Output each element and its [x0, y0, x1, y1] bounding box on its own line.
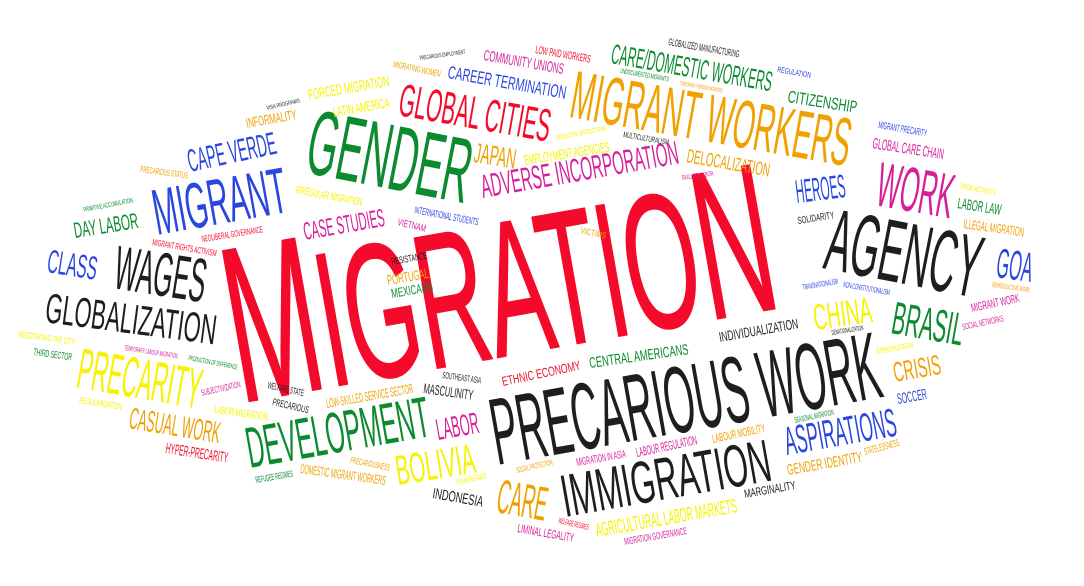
word: Globalization: GLOBALIZATION: [43, 284, 219, 353]
word: Migrant Rights Activism: MIGRANT RIGHTS ACTIVISM: [152, 237, 217, 258]
word: Ethnic Economy: ETHNIC ECONOMY: [501, 358, 582, 389]
word cloud: PRECARITY: [73, 337, 207, 422]
word cloud: SOCIAL NETWORKS: [961, 313, 1004, 332]
word: Labour Mobility: LABOUR MOBILITY: [711, 421, 766, 446]
word cloud: ADVERSE INCORPORATION: [478, 134, 681, 205]
word: Citizenship: CITIZENSHIP: [786, 87, 858, 117]
word: Resistance: RESISTANCE: [391, 251, 428, 268]
word cloud: SYRIAN REFUGEES: [455, 471, 488, 487]
word: Vietnam: VIETNAM: [396, 217, 427, 235]
word cloud: CARE: [493, 471, 552, 532]
word cloud: ASPIRATIONS: [781, 401, 900, 464]
word cloud: SOCIAL PROTECTION: [515, 458, 554, 475]
word: Latin America: LATIN AMERICA: [332, 94, 391, 120]
word cloud: TRANSNATIONALISM: [802, 277, 839, 292]
word: Precarious Employment: PRECARIOUS EMPLOYMENT: [419, 50, 466, 62]
word: Labor Law: LABOR LAW: [956, 195, 1003, 219]
word: Low Paid Workers: LOW PAID WORKERS: [534, 44, 592, 66]
word cloud: BRASIL: [888, 292, 968, 355]
word: Negotiating the City: NEGOTIATING THE CITY: [18, 329, 76, 347]
word: Day Labor: DAY LABOR: [72, 208, 140, 243]
word: Primitive Accumulation: PRIMITIVE ACCUMULATION: [83, 198, 133, 214]
word cloud: CLASS: [45, 242, 100, 287]
word: Portugal: PORTUGAL: [386, 265, 430, 288]
word cloud: DOMESTIC MIGRANT WORKERS: [300, 461, 387, 488]
word cloud: WAGES: [110, 234, 211, 316]
word cloud: HYPER-PRECARITY: [164, 440, 229, 467]
word: Union Activists: UNION ACTIVISTS: [959, 181, 997, 198]
word: Regularization: REGULARIZATION: [79, 395, 123, 412]
word cloud: WELFARE STATE: [266, 380, 305, 399]
word cloud: INTERNATIONAL STUDENTS: [413, 205, 479, 228]
word cloud: WORK: [872, 150, 960, 232]
word: Individualization: INDIVIDUALIZATION: [718, 315, 799, 345]
word: Community Unions: COMMUNITY UNIONS: [482, 47, 565, 78]
word: Masculinity: MASCULINITY: [423, 380, 475, 403]
word: Delocalization: DELOCALIZATION: [685, 146, 772, 182]
word cloud: AGRICULTURAL LABOR MARKETS: [594, 495, 739, 542]
word: Migrant Work: MIGRANT WORK: [970, 291, 1021, 315]
word cloud: REPRODUCTIVE WORK: [992, 282, 1030, 294]
word cloud: GLOBALIZED MANUFACTURING: [667, 37, 740, 60]
word cloud: CARE/DOMESTIC WORKERS: [609, 38, 775, 97]
word cloud: SUBJECTIVIZATION: [200, 379, 241, 398]
word: China: CHINA: [810, 289, 875, 338]
word cloud: MIGRATION GOVERNANCE: [624, 526, 688, 548]
word: Labor Migration: LABOR MIGRATION: [214, 404, 269, 423]
word: Mexicans: MEXICANS: [390, 279, 434, 301]
word cloud: NON-CONSTITUTIONALISM: [843, 280, 891, 297]
word cloud: WELFARE REGIMES: [558, 516, 590, 532]
word cloud: PRODUCTION OF DIFFERENCE: [188, 355, 238, 372]
word cloud: STATELESSNESS: [863, 438, 901, 458]
word cloud: MIGRATION IN ASIA: [575, 448, 627, 469]
word cloud: GLOBAL CITIES: [395, 74, 555, 151]
word cloud: GLOBAL CARE CHAIN: [871, 135, 945, 163]
word: Gender Identity: GENDER IDENTITY: [786, 449, 864, 479]
word cloud: PRODUCTIVE RESTRUCTURING: [556, 125, 607, 142]
word: Marginality: MARGINALITY: [743, 478, 797, 501]
word cloud: GENDER: [299, 92, 481, 223]
word cloud: TEMPORARY LABOUR MIGRATION: [124, 345, 178, 360]
word: Skilled Labor: SKILLED LABOR: [681, 171, 714, 182]
word: Migrating Women: MIGRATING WOMEN: [393, 59, 442, 79]
word: Central Americans: CENTRAL AMERICANS: [588, 341, 690, 372]
word cloud: CASUAL WORK: [127, 402, 223, 450]
word: Crisis: CRISIS: [891, 349, 943, 388]
word: Precarious Status: PRECARIOUS STATUS: [140, 164, 189, 181]
word: Employment Agencies: EMPLOYMENT AGENCIES: [523, 139, 610, 168]
word: Indonesia: INDONESIA: [431, 485, 484, 511]
word cloud: MIGRANT: [147, 153, 292, 249]
word cloud: SOCCER: [896, 386, 928, 408]
word: Migration: MIGRATION: [205, 110, 792, 450]
word: Forced Migration: FORCED MIGRATION: [307, 73, 390, 104]
word: Bolivia: BOLIVIA: [392, 435, 478, 494]
word: Liminal Legality: LIMINAL LEGALITY: [516, 521, 575, 545]
word cloud: LABOUR REGULATION: [635, 432, 698, 460]
word cloud: LABOR: [433, 407, 482, 447]
word cloud: LOW-SKILLED SERVICE SECTOR: [325, 381, 414, 411]
word: Third Sector: THIRD SECTOR: [33, 347, 73, 363]
word: Southeast Asia: SOUTHEAST ASIA: [442, 370, 482, 385]
word cloud: CAPE VERDE: [184, 125, 279, 179]
word: Undocumented Migrants: UNDOCUMENTED MIGRANTS: [620, 68, 669, 84]
word cloud: CASE STUDIES: [301, 204, 387, 246]
word cloud: DENATIONALIZATION: [831, 325, 864, 337]
word cloud: HEROES: [793, 167, 847, 210]
word: Career Termination: CAREER TERMINATION: [446, 62, 568, 103]
word: Multiculturalism: MULTICULTURALISM: [623, 130, 670, 147]
word: Solidarity: SOLIDARITY: [797, 210, 835, 227]
word: Regulation: REGULATION: [777, 65, 812, 80]
word cloud: REFUGEE REGIMES: [255, 469, 294, 485]
word cloud: TEMPORARY FOREIGN WORKERS: [679, 81, 723, 95]
word: Informality: INFORMALITY: [245, 106, 298, 131]
word: Japan: JAPAN: [472, 137, 518, 174]
word: Precarious: PRECARIOUS: [271, 397, 310, 416]
word: Visa Programs: VISA PROGRAMS: [266, 98, 301, 112]
word: Immigration: IMMIGRATION: [556, 427, 776, 530]
word cloud: DEVELOPMENT: [241, 385, 434, 481]
word cloud: SUPEREXPLOITATION: [876, 341, 914, 356]
word cloud: PRECARIOUSNESS: [350, 455, 391, 473]
word: Neoliberal Governance: NEOLIBERAL GOVERNANCE: [201, 224, 264, 244]
word cloud: SEASONAL MIGRATION: [794, 408, 835, 425]
word cloud: MIGRANT PRECARITY: [877, 120, 928, 139]
word: Irregular Migration: IRREGULAR MIGRATION: [294, 184, 363, 209]
word: Victims: VICTIMS: [580, 225, 607, 241]
